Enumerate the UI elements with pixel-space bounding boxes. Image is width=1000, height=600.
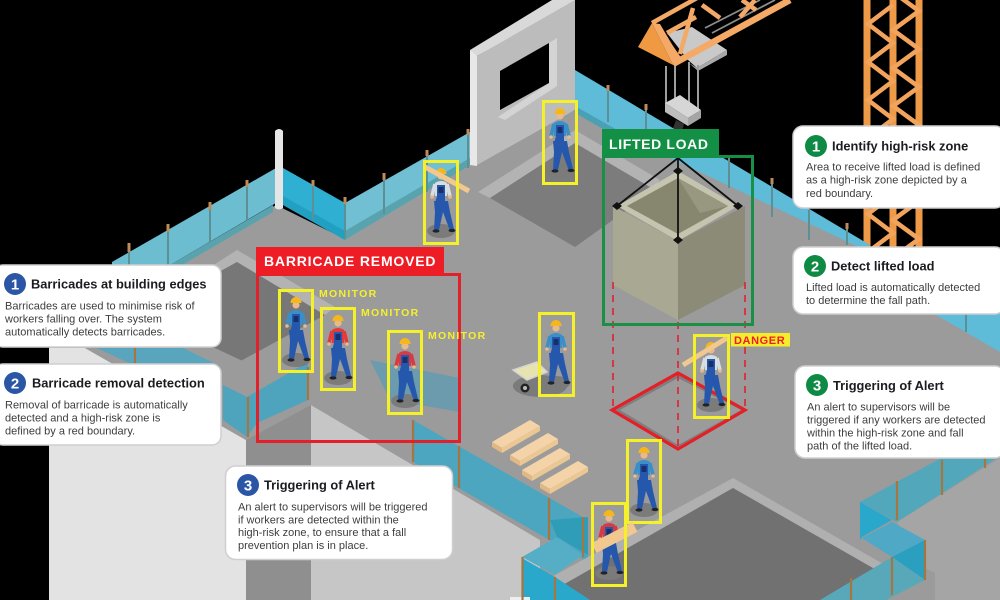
panel: barricade removal detection: Barricade removal detection	[32, 376, 205, 390]
worker: plank carrier top	[424, 162, 469, 244]
lifted load label: LIFTED LOAD	[609, 136, 709, 152]
panel: triggering of alert right: triggered if any workers are detected	[807, 414, 986, 426]
panel: identify high-risk zone: Area to receive lifted load is defined	[806, 162, 980, 174]
panel: barricade removal detection: detected and a high-risk zone is	[5, 412, 161, 424]
left floor pit	[150, 250, 335, 363]
zone of danger on floor	[612, 373, 745, 449]
panel: triggering of alert left	[226, 466, 452, 560]
panel: triggering of alert right	[795, 366, 1000, 458]
lower left barricade box	[510, 517, 590, 600]
panel: detect lifted load: Lifted load is automatically detected	[806, 282, 980, 294]
panel: barricades at building edges: workers falling over. The system	[4, 314, 162, 326]
panel: identify high-risk zone: as a high-risk zone depicted by a	[806, 174, 968, 186]
panel: triggering of alert right: within the high-risk zone and fall	[806, 428, 964, 440]
timber stacks	[492, 420, 588, 494]
lower centre fence	[413, 420, 588, 562]
panel: barricades at building edges: Barricades at building edges	[31, 276, 207, 292]
fence: left run	[112, 168, 276, 265]
crane jib	[638, 0, 790, 71]
fall path dashed lines	[613, 282, 745, 449]
worker: lower pointing	[628, 440, 660, 522]
panel: triggering of alert left: prevention plan is in place.	[238, 540, 368, 552]
upper floor pit	[478, 130, 660, 247]
removed barricade strips	[97, 348, 460, 437]
worker: monitored 3	[388, 332, 422, 414]
panel: barricades at building edges: automatically detects barricades.	[5, 326, 165, 338]
floor right of lower fence	[897, 458, 1000, 600]
panel: triggering of alert right: An alert to supervisors will be	[807, 402, 950, 414]
panel: triggering of alert right: path of the lifted load.	[807, 440, 912, 452]
panel: barricades at building edges	[0, 265, 221, 347]
high-risk zone red diamond	[612, 373, 745, 449]
hoist block	[665, 62, 701, 131]
central lower pit	[522, 478, 885, 600]
panel: triggering of alert right: 3	[813, 378, 821, 394]
far right fence fragment	[915, 310, 1000, 352]
concrete column	[275, 129, 283, 210]
side wall of building	[49, 348, 540, 600]
worker: monitored 1	[280, 290, 312, 372]
panel: identify high-risk zone: red boundary.	[806, 188, 873, 200]
fence: V corner	[283, 129, 470, 240]
wheelbarrow	[513, 362, 567, 397]
barricade removed label: BARRICADE REMOVED	[264, 253, 436, 269]
panel: triggering of alert right: Triggering of Alert	[833, 378, 945, 393]
monitor labels: MONITOR	[361, 307, 420, 319]
panel: detect lifted load: Detect lifted load	[831, 258, 934, 274]
monitor labels: MONITOR	[428, 330, 486, 342]
concrete wall panel	[470, 0, 575, 166]
lower right barricade box	[820, 456, 1000, 600]
panel: barricade removal detection: Removal of barricade is automatically	[5, 400, 188, 412]
panel: triggering of alert left: high-risk zone, to ensure that a fall	[238, 527, 406, 539]
panel: detect lifted load: 2	[811, 258, 819, 276]
lifted load label	[602, 129, 752, 158]
monitor labels	[319, 288, 486, 342]
panel: triggering of alert left: An alert to supervisors will be triggered	[238, 502, 428, 514]
lifted concrete box	[612, 158, 745, 320]
worker: wheelbarrow	[540, 314, 574, 396]
danger label: DANGER	[734, 335, 785, 347]
panel: barricades at building edges: Barricades are used to minimise risk of	[5, 300, 195, 312]
worker: monitored 2	[322, 308, 354, 390]
panel: detect lifted load	[793, 247, 1000, 314]
fence: right run	[575, 70, 870, 250]
worker: in danger zone	[683, 336, 728, 418]
worker: by wall	[544, 102, 576, 184]
panel: triggering of alert left: Triggering of Alert	[264, 478, 376, 492]
panel: barricades at building edges: 1	[11, 276, 19, 294]
panel: triggering of alert left: 3	[244, 478, 252, 494]
panel: barricade removal detection	[0, 364, 221, 445]
lifted load zone	[604, 156, 752, 324]
worker: lower plank carrier	[592, 504, 635, 586]
floor slab	[49, 110, 1000, 600]
monitor labels: MONITOR	[319, 288, 378, 300]
barricade removed zone	[258, 274, 460, 442]
barricade removed label	[256, 247, 444, 275]
panel: barricade removal detection: defined by a red boundary.	[5, 426, 135, 438]
panel: identify high-risk zone: 1	[812, 138, 820, 156]
panel: barricade removal detection: 2	[11, 376, 19, 392]
panel: identify high-risk zone	[793, 126, 1000, 208]
panel: detect lifted load: to determine the fall path.	[806, 295, 930, 307]
panel: identify high-risk zone: Identify high-risk zone	[832, 138, 968, 154]
crane tower	[867, 0, 919, 258]
panel: triggering of alert left: if workers are detected within the	[238, 514, 399, 526]
